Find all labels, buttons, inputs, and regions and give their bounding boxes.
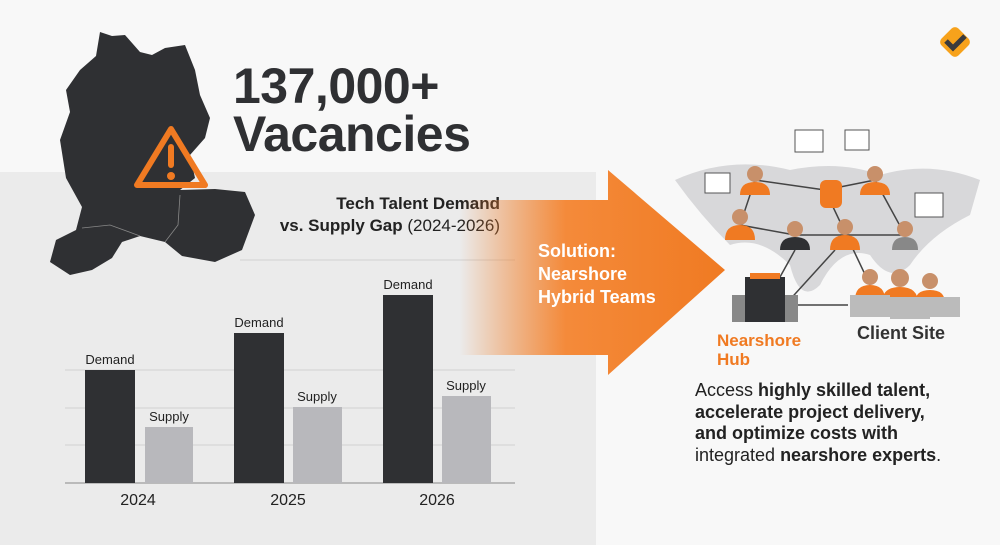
people bbox=[725, 166, 945, 303]
gray chart panel bbox=[0, 172, 596, 545]
chart title: Tech Talent Demand bbox=[336, 194, 500, 213]
label: nearshore hub: Nearshore bbox=[717, 331, 801, 350]
network illustration bbox=[675, 130, 980, 322]
map: DACH region bbox=[50, 32, 255, 275]
arrow text: Solution: bbox=[538, 241, 616, 261]
bar chart: Supply bbox=[297, 389, 337, 404]
bar chart: Demand bbox=[383, 277, 433, 292]
bar chart bbox=[65, 260, 515, 509]
title: vacancies: 137,000+ bbox=[233, 58, 439, 114]
chart title bbox=[280, 194, 500, 235]
description text: integrated nearshore experts. bbox=[695, 444, 941, 464]
chart title: vs. Supply Gap (2024-2026) bbox=[280, 216, 500, 235]
building bbox=[732, 273, 798, 322]
description text: and optimize costs with bbox=[695, 423, 898, 443]
bar chart: 2026 bbox=[419, 492, 455, 509]
description text: Access highly skilled talent, bbox=[695, 380, 930, 400]
description text bbox=[695, 380, 941, 465]
arrow text bbox=[538, 241, 656, 307]
bar chart: Demand bbox=[234, 315, 284, 330]
arrow: solution bbox=[464, 170, 725, 375]
bar chart: 2024 bbox=[120, 492, 156, 509]
bar chart: Supply bbox=[149, 409, 189, 424]
bar chart: Supply bbox=[446, 378, 486, 393]
arrow text: Nearshore bbox=[538, 264, 627, 284]
label: nearshore hub: Hub bbox=[717, 350, 750, 369]
title: vacancies bbox=[233, 58, 470, 162]
description text: accelerate project delivery, bbox=[695, 402, 925, 422]
title: vacancies: Vacancies bbox=[233, 106, 470, 162]
logo bbox=[940, 27, 970, 57]
bar chart: 2025 bbox=[270, 492, 306, 509]
arrow text: Hybrid Teams bbox=[538, 287, 656, 307]
label: nearshore hub bbox=[717, 331, 801, 369]
label: client site: Client Site bbox=[857, 323, 945, 343]
icon: warning triangle bbox=[134, 126, 208, 188]
bar chart: Demand bbox=[85, 352, 135, 367]
